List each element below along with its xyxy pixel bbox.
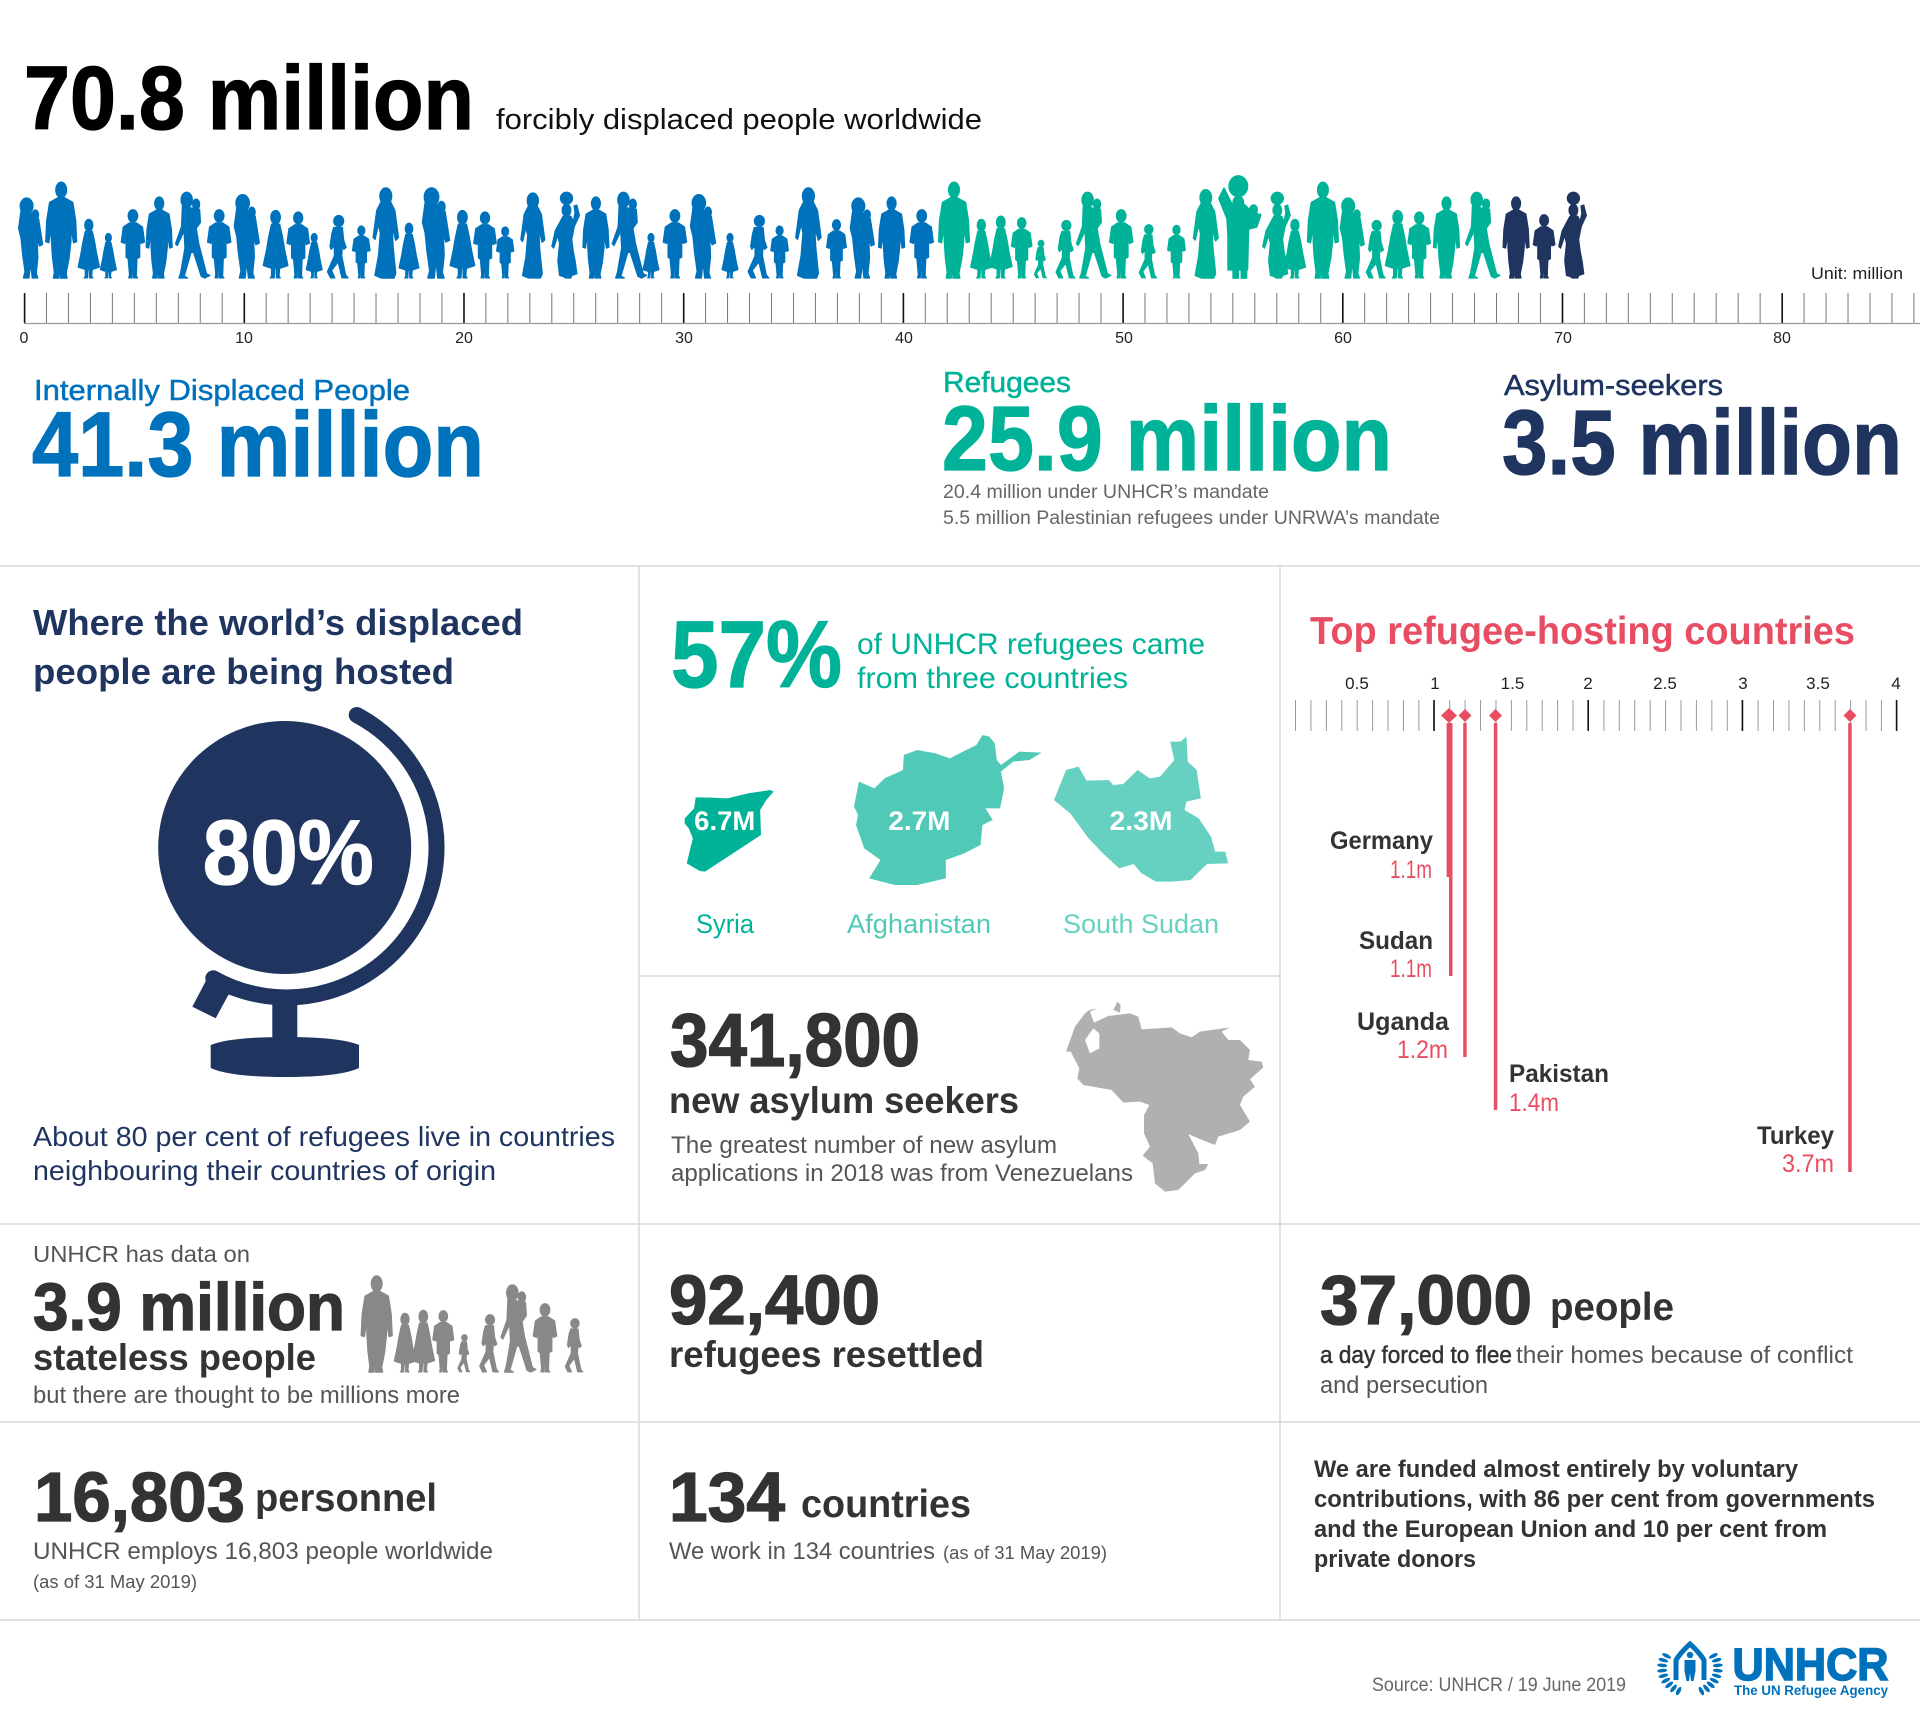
label: Uganda: Uganda xyxy=(1357,1008,1450,1036)
chart axis: 4 xyxy=(1891,674,1901,693)
stat: 57%: 57% xyxy=(671,602,842,708)
heading: hosting countries: Top refugee-hosting countries xyxy=(1310,610,1855,653)
panel: funding: and the European Union and 10 per cent from xyxy=(1314,1516,1827,1543)
map: Afghanistan: 2.7M xyxy=(888,806,950,836)
ruler: millions scale: 0 xyxy=(20,330,29,347)
label: Germany xyxy=(1330,827,1433,884)
text: three countries xyxy=(857,628,1205,695)
panel: countries: We work in 134 countries xyxy=(669,1538,935,1565)
label: Sudan: 1.1m xyxy=(1390,955,1432,983)
icon: globe with 80% xyxy=(158,715,437,1077)
stat: refugees: 25.9 million xyxy=(942,388,1392,490)
map: Syria: Syria xyxy=(696,909,755,939)
text: three countries: of UNHCR refugees came xyxy=(857,628,1205,661)
logo: UNHCR: UNHCR xyxy=(1732,1639,1888,1690)
map: Afghanistan xyxy=(847,735,1042,939)
heading: hosted: people are being hosted xyxy=(33,651,454,692)
text: new asylum seekers: new asylum seekers xyxy=(669,1080,1019,1121)
panel: stateless people xyxy=(33,1241,583,1409)
chart axis: 0.5 xyxy=(1345,674,1369,693)
chart axis: 1.5 xyxy=(1501,674,1524,693)
panel: countries: 134 xyxy=(669,1458,785,1536)
panel: personnel: personnel xyxy=(255,1477,437,1520)
panel: personnel: 16,803 xyxy=(34,1458,245,1536)
label: Germany: Germany xyxy=(1330,827,1433,855)
label: Sudan: Sudan xyxy=(1359,927,1433,955)
text: asylum description xyxy=(671,1132,1133,1187)
label: Uganda: 1.2m xyxy=(1397,1036,1448,1064)
panel: people forced to flee: people xyxy=(1550,1286,1674,1329)
panel: refugees resettled: 92,400 xyxy=(669,1261,880,1339)
panel: refugees resettled: refugees resettled xyxy=(669,1334,984,1375)
label: Turkey: 3.7m xyxy=(1782,1150,1834,1178)
text: three countries: from three countries xyxy=(857,662,1128,695)
source: Source: UNHCR / 19 June 2019 xyxy=(1372,1675,1626,1696)
panel: countries xyxy=(669,1458,1107,1565)
panel: 57 per cent from three countries xyxy=(671,602,1228,939)
panel: where displaced people are hosted xyxy=(33,602,615,1186)
panel: personnel xyxy=(33,1458,493,1592)
heading: hosted xyxy=(33,602,523,692)
map: Venezuela xyxy=(1066,1002,1263,1192)
stat: asylum-seekers: Asylum-seekers xyxy=(1504,370,1723,402)
logo: UNHCR xyxy=(1657,1639,1888,1698)
ruler: millions scale: 80 xyxy=(1773,330,1791,347)
chart axis: 3.5 xyxy=(1806,674,1830,693)
icon: grey family xyxy=(361,1276,583,1372)
panel: funding: contributions, with 86 per cent from governments xyxy=(1314,1486,1875,1513)
panel: funding xyxy=(1314,1456,1875,1573)
text: hosted description: neighbouring their countries of origin xyxy=(33,1155,496,1186)
stat: refugees xyxy=(942,367,1440,529)
stat: refugees: 5.5 million Palestinian refugees under UNRWA’s mandate xyxy=(943,508,1440,529)
stat: 341,800: 341,800 xyxy=(670,998,920,1082)
label: Pakistan: 1.4m xyxy=(1509,1089,1559,1117)
title: forcibly displaced people worldwide xyxy=(496,104,982,136)
map: South Sudan: South Sudan xyxy=(1063,909,1219,939)
map: South Sudan: 2.3M xyxy=(1110,806,1172,836)
chart axis: 3 xyxy=(1738,674,1748,693)
label: Pakistan xyxy=(1509,1060,1609,1117)
people: refugees xyxy=(939,176,1500,278)
title xyxy=(24,49,982,149)
panel: refugees resettled xyxy=(669,1261,984,1375)
text: asylum description: The greatest number of new asylum xyxy=(671,1132,1057,1159)
ruler: millions scale: 70 xyxy=(1554,330,1572,347)
bars and markers xyxy=(1441,708,1856,1172)
stat: internally displaced people: Internally Displaced People xyxy=(34,375,410,407)
panel: people forced to flee: 37,000 xyxy=(1320,1261,1532,1339)
label: Germany: 1.1m xyxy=(1390,856,1432,884)
map: Afghanistan: Afghanistan xyxy=(847,909,991,939)
text: asylum description: applications in 2018 was from Venezuelans xyxy=(671,1160,1133,1187)
panel: personnel: UNHCR employs 16,803 people worldwide xyxy=(33,1538,493,1565)
heading: hosted: Where the world’s displaced xyxy=(33,602,523,643)
panel: funding: private donors xyxy=(1314,1546,1476,1573)
stat: refugees: 20.4 million under UNHCR’s mandate xyxy=(943,482,1269,503)
panel: countries: countries xyxy=(801,1483,971,1526)
chart axis xyxy=(1295,674,1901,716)
people: asylum-seekers xyxy=(1503,192,1586,278)
map: Syria: 6.7M xyxy=(694,806,755,836)
chart axis: 2.5 xyxy=(1653,674,1677,693)
ruler: millions scale: 10 xyxy=(235,330,253,347)
panel: top refugee-hosting countries xyxy=(1295,610,1901,1178)
ruler: millions scale xyxy=(20,308,1920,347)
panel: people forced to flee xyxy=(1320,1261,1853,1399)
label: Turkey xyxy=(1757,1122,1834,1178)
label: Uganda xyxy=(1357,1008,1450,1064)
panel: stateless people: 3.9 million xyxy=(33,1270,345,1345)
icon: laurel emblem xyxy=(1657,1644,1723,1696)
logo: UNHCR: The UN Refugee Agency xyxy=(1734,1682,1888,1698)
ruler: millions scale: 50 xyxy=(1115,330,1133,347)
panel: countries: (as of 31 May 2019) xyxy=(943,1543,1107,1563)
label: Pakistan: Pakistan xyxy=(1509,1060,1609,1088)
people: internally displaced xyxy=(19,182,933,278)
panel: stateless people: stateless people xyxy=(33,1337,316,1378)
panel: personnel: (as of 31 May 2019) xyxy=(33,1572,197,1592)
panel: people forced to flee: and persecution xyxy=(1320,1372,1488,1399)
chart axis: 2 xyxy=(1583,674,1593,693)
ruler: millions scale: 30 xyxy=(675,330,693,347)
ruler: millions scale: 20 xyxy=(455,330,473,347)
panel: funding: We are funded almost entirely by voluntary xyxy=(1314,1456,1799,1483)
map: South Sudan xyxy=(1054,737,1228,939)
label: Sudan xyxy=(1359,927,1433,983)
text: hosted description: About 80 per cent of refugees live in countries xyxy=(33,1121,615,1152)
label: Turkey: Turkey xyxy=(1757,1122,1834,1150)
stat: refugees: Refugees xyxy=(943,367,1071,399)
map: Syria xyxy=(685,790,774,939)
stat: internally displaced people: 41.3 million xyxy=(32,394,484,496)
ruler: millions scale: 40 xyxy=(895,330,913,347)
panel: people forced to flee: a day forced to flee xyxy=(1320,1342,1512,1369)
panel: stateless people: UNHCR has data on xyxy=(33,1241,250,1267)
text: hosted description xyxy=(33,1121,615,1186)
panel: people forced to flee: their homes because of conflict xyxy=(1516,1342,1853,1369)
icon: globe with 80%: 80% xyxy=(203,802,374,904)
unit label: Unit: million xyxy=(1811,264,1903,283)
panel: stateless people: but there are thought to be millions more xyxy=(33,1382,460,1409)
title: 70.8 million xyxy=(24,49,474,149)
ruler: millions scale: 60 xyxy=(1334,330,1352,347)
chart axis: 1 xyxy=(1430,674,1440,693)
panel: new asylum seekers xyxy=(669,998,1263,1192)
